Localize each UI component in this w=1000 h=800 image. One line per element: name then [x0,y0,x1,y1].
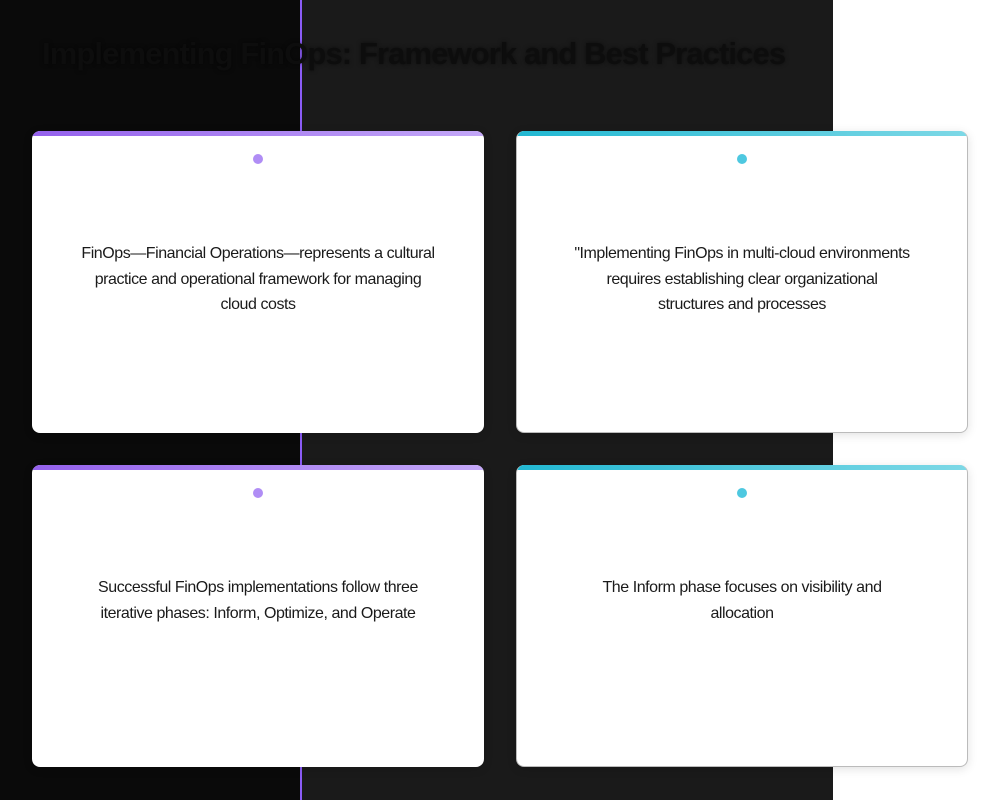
text block: requires establishing clear organizational [606,270,878,288]
dot icon [737,488,747,498]
panel: card 4 [516,465,968,767]
dot icon [253,488,263,498]
text block [602,579,882,622]
panel: card 2 [516,131,968,433]
text block [574,245,910,313]
text block: cloud costs [220,296,296,313]
text block: structures and processes [658,296,826,313]
title: Implementing FinOps: Framework and Best Practices [42,36,785,71]
text block [81,245,435,313]
text block: allocation [710,604,774,622]
text block: "Implementing FinOps in multi-cloud environments [574,245,910,262]
text block: iterative phases: Inform, Optimize, and Operate [100,604,416,622]
text block: The Inform phase focuses on visibility and [602,579,882,596]
dot icon [737,154,747,164]
text block: FinOps—Financial Operations—represents a cultural [81,245,435,262]
text block [98,579,418,622]
panel: card 1 [32,131,484,433]
dot icon [253,154,263,164]
panel: card 3 [32,465,484,767]
text block: Successful FinOps implementations follow three [98,579,418,596]
text block: practice and operational framework for managing [95,270,421,288]
